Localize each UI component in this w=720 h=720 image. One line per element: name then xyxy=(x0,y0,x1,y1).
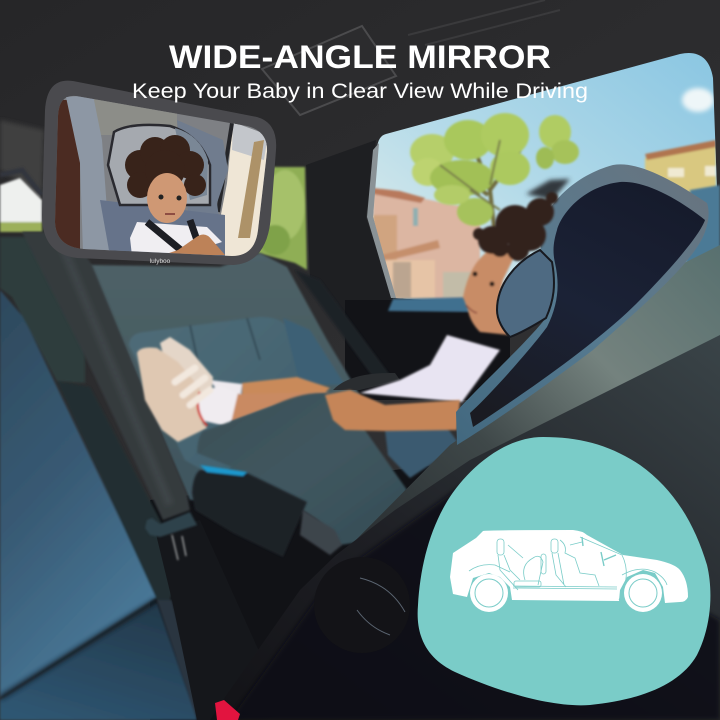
child in profile xyxy=(463,192,558,335)
baby shirt in mirror xyxy=(130,222,222,256)
padded strap cover with blue tag xyxy=(192,465,342,557)
car seat shell: lower dark band xyxy=(210,335,720,720)
hair xyxy=(473,192,558,261)
head cushion xyxy=(497,250,554,337)
rear seat lower buckle column xyxy=(155,520,290,720)
rear seat left cushion xyxy=(0,237,197,720)
far left window xyxy=(0,170,42,232)
seat back xyxy=(88,253,390,500)
blue cushion at car seat base xyxy=(385,425,460,478)
subtitle: Keep Your Baby in Clear View While Driving xyxy=(132,80,588,103)
baby legs, socks and shoes xyxy=(137,337,330,442)
face xyxy=(463,250,515,335)
dark cabin floor base xyxy=(150,430,720,720)
child's arm and hand xyxy=(325,390,460,431)
sun visor outlines on ceiling xyxy=(262,0,560,115)
teal badge with car icon xyxy=(418,437,710,705)
cloud xyxy=(682,88,714,112)
window trim xyxy=(367,143,396,298)
car seat backrest inner xyxy=(470,182,705,427)
mirror logo: lulyboo xyxy=(150,258,171,265)
pillar between windows xyxy=(306,140,393,345)
shirt xyxy=(360,335,500,402)
baby hands in mirror xyxy=(169,234,225,256)
house: left xyxy=(373,188,480,300)
wide-angle baby mirror xyxy=(42,81,276,265)
small rear window behind mirror xyxy=(258,167,307,270)
rotation dial xyxy=(314,557,410,653)
car silhouette xyxy=(450,530,688,612)
ceiling grey patch left of mirror xyxy=(0,120,44,195)
seat headrest behind hair xyxy=(526,179,570,200)
seat belt xyxy=(22,232,197,560)
house: right xyxy=(645,140,716,195)
baby face in mirror xyxy=(147,173,187,223)
tree: foliage xyxy=(410,113,579,235)
mirror frame xyxy=(42,81,276,265)
red buckle tab xyxy=(215,700,240,720)
car seat backrest rim xyxy=(456,164,709,445)
dark bottom area xyxy=(230,480,720,720)
car seat leg cover xyxy=(197,393,407,545)
door panel and sill xyxy=(345,297,510,400)
title: WIDE-ANGLE MIRROR xyxy=(169,39,551,75)
car seat shell: light upper band xyxy=(330,245,720,640)
car interior line art xyxy=(469,537,667,600)
baby hair in mirror xyxy=(125,135,206,198)
side window with outdoor scene xyxy=(373,53,717,320)
car seat side wing xyxy=(685,185,720,300)
arm pad behind hand xyxy=(333,373,400,390)
mirror glass xyxy=(55,96,267,256)
